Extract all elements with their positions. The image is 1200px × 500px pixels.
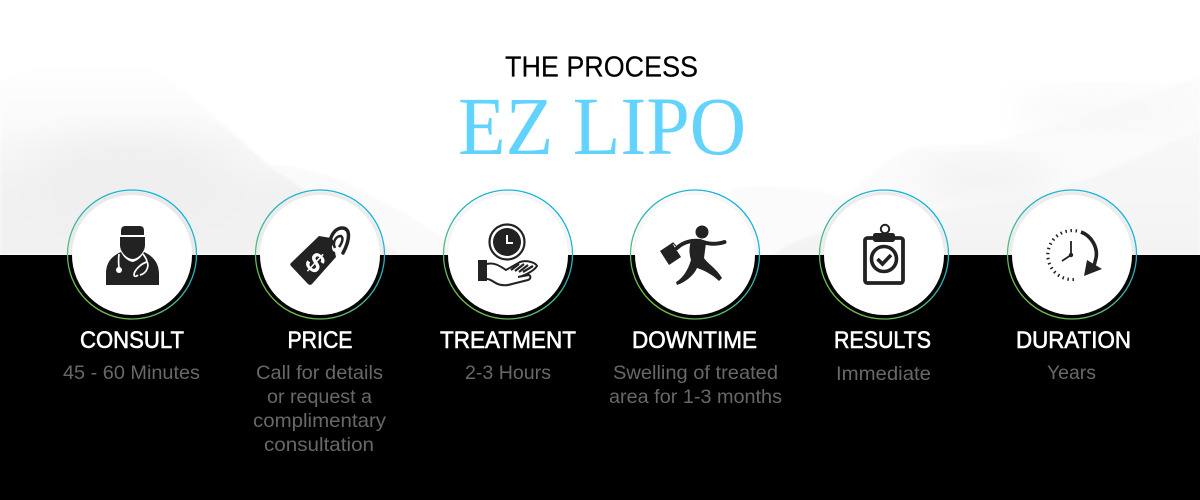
text: consult detail: 45 - 60 Minutes [63, 362, 200, 384]
icon: running man with briefcase [660, 226, 724, 285]
icon: clock above open hand [478, 224, 537, 285]
text: downtime detail [609, 362, 782, 408]
icon: price tag: $ [299, 246, 332, 280]
step: downtime [609, 190, 782, 408]
badge: duration circle [1008, 190, 1136, 319]
heading: PRICE: PRICE [288, 327, 352, 354]
step: results [820, 190, 948, 385]
step: duration [1008, 190, 1136, 384]
text: price detail: consultation [264, 434, 374, 456]
text: price detail: Call for details [256, 362, 383, 384]
icon: price tag [290, 228, 348, 285]
badge: treatment circle [444, 190, 572, 319]
text: downtime detail: area for 1-3 months [609, 386, 782, 408]
text: downtime detail: Swelling of treated [613, 362, 778, 384]
badge: consult circle [68, 190, 196, 319]
badge: downtime circle [630, 190, 760, 319]
icon: clipboard with check mark [865, 225, 903, 283]
step: price [253, 190, 386, 456]
bottom black section [0, 255, 1200, 500]
text: price detail [253, 362, 386, 456]
text: duration detail: Years [1047, 362, 1096, 384]
icon: clock with clockwise arrow [1048, 231, 1102, 280]
heading: CONSULT: CONSULT [80, 327, 184, 354]
heading: TREATMENT: TREATMENT [440, 327, 576, 354]
text: price detail: complimentary [253, 410, 386, 432]
badge: results circle [820, 190, 948, 319]
step: consult [63, 190, 200, 384]
background: white upper section with soft grey waves [0, 0, 1200, 255]
badge: price circle [256, 190, 384, 319]
title: THE PROCESS: THE PROCESS [505, 52, 698, 84]
text: treatment detail: 2-3 Hours [465, 362, 551, 384]
heading: DOWNTIME: DOWNTIME [632, 327, 757, 354]
step: treatment [440, 190, 576, 384]
text: results detail: Immediate [836, 363, 931, 385]
title: EZ LIPO: EZ LIPO [458, 80, 746, 172]
heading: RESULTS: RESULTS [834, 327, 931, 354]
text: price detail: or request a [267, 386, 372, 408]
heading: DURATION: DURATION [1016, 327, 1131, 354]
icon: doctor with stethoscope [106, 226, 159, 285]
